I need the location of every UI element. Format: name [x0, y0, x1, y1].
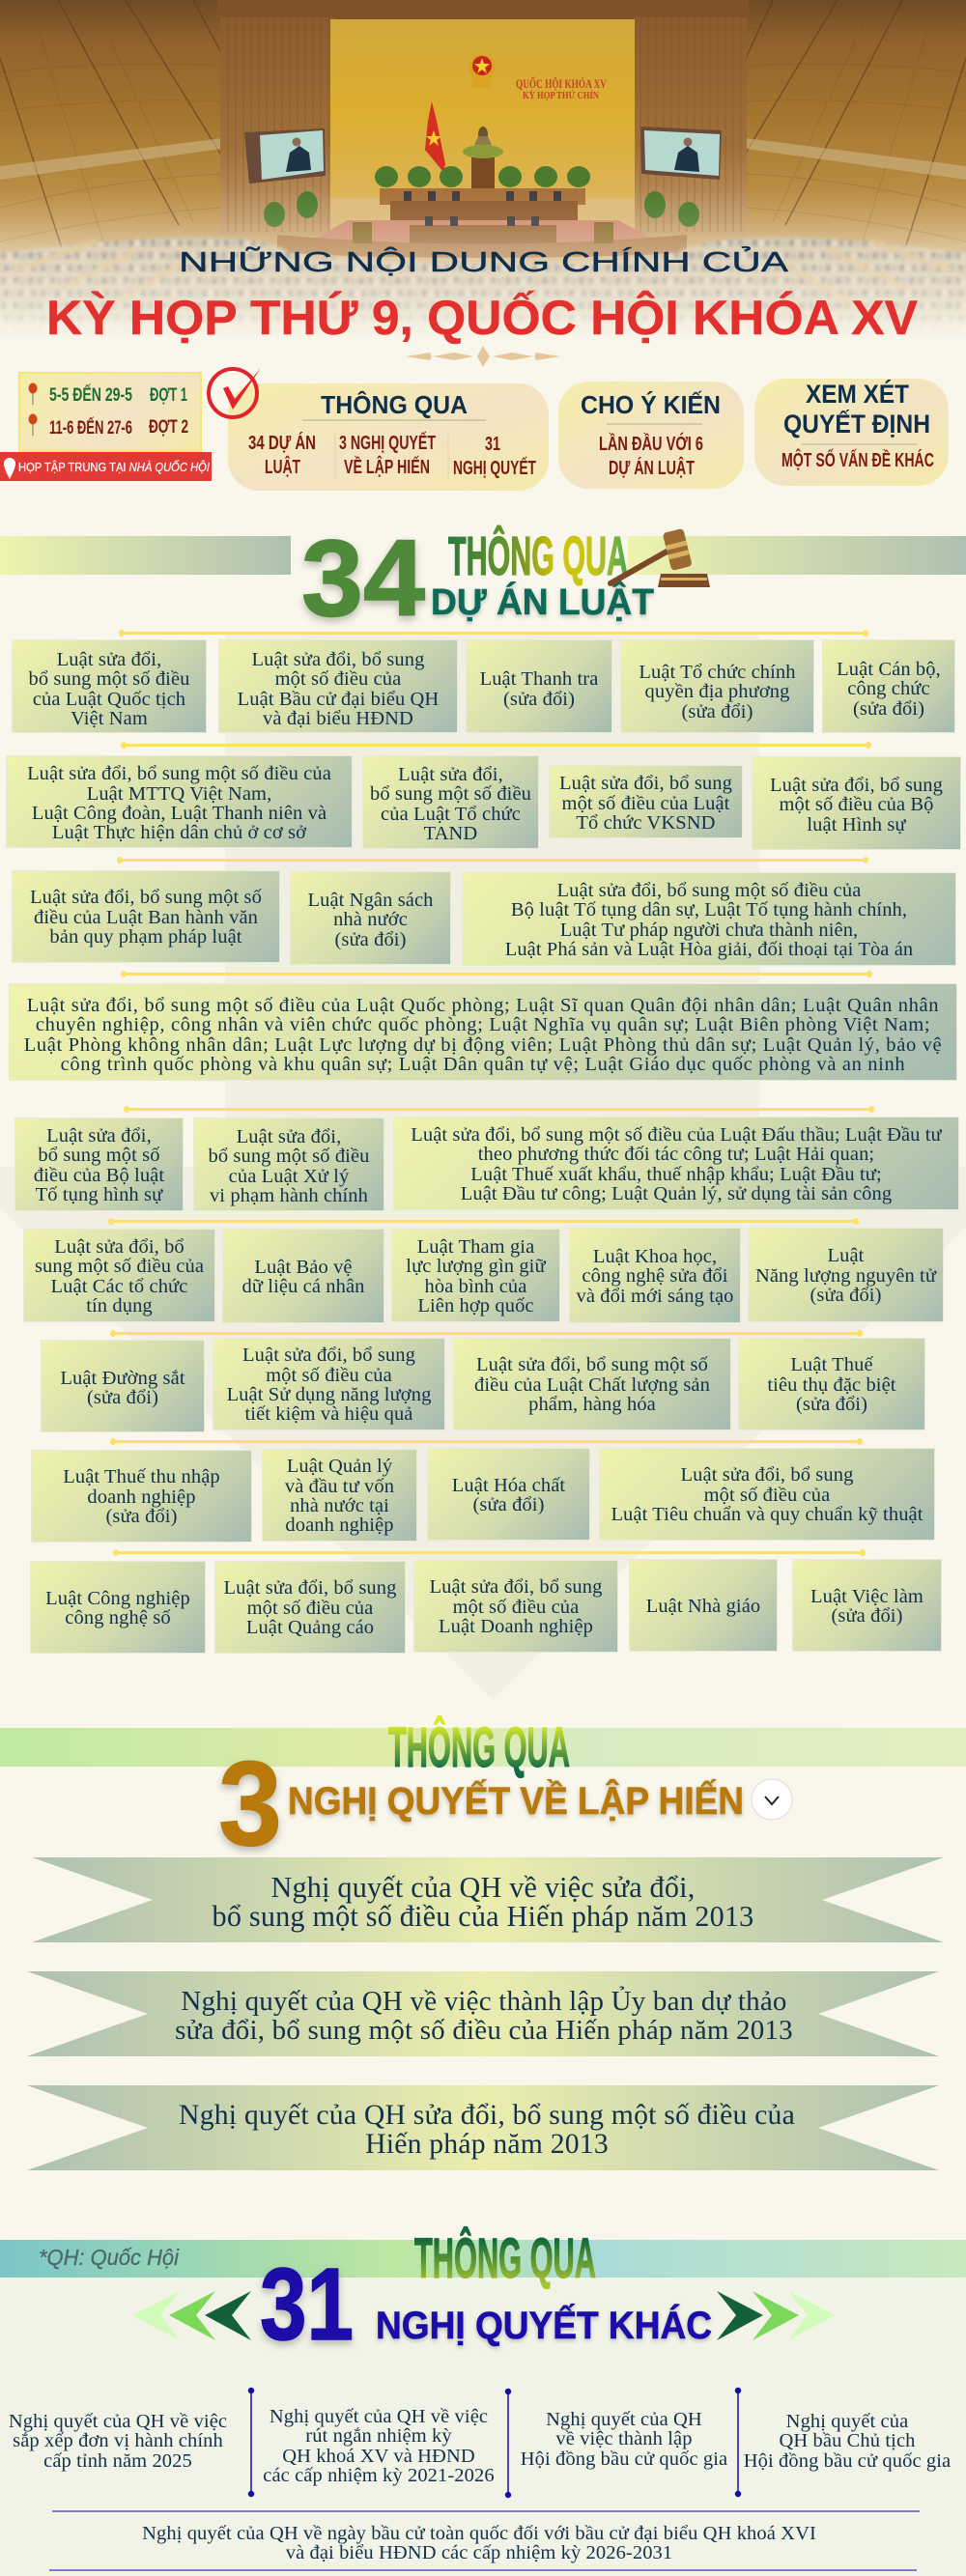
law box: Đường sắt: Luật Đường sắt [60, 1368, 185, 1389]
ribbon 1 text: Nghị quyết của QH về việc sửa đổi, [271, 1871, 695, 1904]
law box: Thanh tra: Luật Thanh tra [480, 668, 598, 690]
law box: Cán bộ, công chức: (sửa đổi) [853, 698, 924, 720]
law box: Cán bộ, công chức [823, 640, 954, 732]
law box: chính quyền địa phương: Luật Tổ chức chính [639, 662, 796, 683]
panel: cho ý kiến [558, 382, 744, 489]
law box: Việc làm [793, 1560, 941, 1651]
phase 1: ĐỢT 1 [150, 385, 187, 406]
law box: Ngân sách nhà nước: Luật Ngân sách [307, 890, 434, 911]
law box: Xử lý vi phạm hành chính: bổ sung một số điều [208, 1146, 370, 1167]
law box: chính quyền địa phương [621, 640, 813, 732]
law box: quản lý vốn nhà nước: nhà nước tại [290, 1495, 389, 1516]
law box: Tổ chức VKSND: một số điều của Luật [562, 793, 729, 814]
law box: Quảng cáo: Luật Quảng cáo [246, 1617, 374, 1638]
law box: Doanh nghiệp: một số điều của [453, 1597, 579, 1618]
law box: năng lượng nguyên tử: Luật [828, 1245, 864, 1266]
law box: Tố tụng: Bộ luật Tố tụng dân sự, Luật Tố tụng hành chính, [511, 899, 907, 920]
ribbon 3 text: Hiến pháp năm 2013 [365, 2129, 609, 2160]
law box: Ngân sách nhà nước: nhà nước [333, 909, 408, 930]
law box: MTTQ: Luật Thực hiện dân chủ ở cơ sở [52, 822, 306, 843]
law box: Tổ chức TAND: TAND [424, 823, 477, 844]
resolution column 4 [744, 2411, 951, 2472]
law box: Ban hành văn bản: điều của Luật Ban hành văn [34, 907, 258, 928]
law box: Việc làm: (sửa đổi) [831, 1605, 903, 1627]
wall caption [516, 76, 607, 101]
law box: Tố tụng: Luật Phá sản và Luật Hòa giải, đối thoại tại Tòa án [505, 939, 913, 960]
date 2: 11-6 ĐẾN 27-6 [49, 417, 132, 439]
panel: thông qua: 3 NGHỊ QUYẾT [339, 432, 436, 454]
law box: Quảng cáo: Luật sửa đổi, bổ sung [224, 1577, 396, 1599]
law box: Ngân sách nhà nước [291, 872, 450, 964]
law box: gìn giữ hòa bình: lực lượng gìn giữ [406, 1256, 546, 1277]
law box: Đấu thầu: Luật Thuế xuất khẩu, thuế nhập khẩu; Luật Đầu tư; [470, 1163, 882, 1184]
law box: Bộ luật Hình sự [753, 757, 960, 849]
arrows right [717, 2291, 835, 2340]
podium tables [277, 188, 687, 258]
law box: Tố tụng hình sự: Tố tụng hình sự [36, 1184, 162, 1205]
law box: Bộ luật Hình sự: luật Hình sự [807, 814, 906, 835]
resolution column 2: QH khoá XV và HĐND [282, 2446, 475, 2467]
ribbon 2 text [175, 1986, 793, 2046]
panel: thông qua [228, 383, 549, 491]
law box: Đấu thầu: theo phương thức đối tác công tư; Luật Hải quan; [478, 1144, 874, 1165]
section heading: 34 dự án luật: DỰ ÁN LUẬT [431, 580, 654, 623]
law box: gìn giữ hòa bình [392, 1230, 559, 1321]
law box: Ngân sách nhà nước: (sửa đổi) [334, 929, 407, 950]
section heading: 3 nghị quyết về lập hiến: NGHỊ QUYẾT VỀ LẬP HIẾN [288, 1778, 744, 1823]
section heading: 31 nghị quyết khác: NGHỊ QUYẾT KHÁC [376, 2303, 712, 2347]
law box: Hóa chất [428, 1449, 589, 1540]
law box: Tổ chức TAND [363, 756, 538, 848]
law box: gìn giữ hòa bình: Luật Tham gia [417, 1236, 534, 1258]
law box: công nghiệp công nghệ số [31, 1562, 205, 1653]
law box: khoa học công nghệ [570, 1229, 740, 1322]
bust and pillar [463, 127, 503, 190]
law box: thuế thu nhập doanh nghiệp: (sửa đổi) [105, 1506, 178, 1527]
law box: khoa học công nghệ: Luật Khoa học, [593, 1246, 717, 1267]
ornament divider [406, 346, 560, 367]
law box: Đấu thầu: Luật Đầu tư công; Luật Quản lý, sử dụng tài sản công [461, 1183, 892, 1204]
resolution column 3: Nghị quyết của QH [546, 2409, 702, 2430]
resolution column 2: các cấp nhiệm kỳ 2021-2026 [263, 2465, 495, 2486]
law box: năng lượng tiết kiệm [213, 1339, 444, 1430]
final resolution text: và đại biểu HĐND các cấp nhiệm kỳ 2026-2031 [286, 2542, 672, 2563]
venue text: HỌP TẬP TRUNG TẠI NHÀ QUỐC HỘI [18, 460, 210, 474]
panel: xem xét quyết định [754, 379, 949, 486]
law box: Nhà giáo [630, 1560, 777, 1651]
law box: tiêu thụ đặc biệt: tiêu thụ đặc biệt [767, 1374, 896, 1396]
icon: pin 1 [29, 382, 37, 405]
section heading: 31 nghị quyết khác: THÔNG QUA [414, 2227, 596, 2290]
law box: Ban hành văn bản [13, 871, 279, 962]
law box: Tố tụng hình sự: điều của Bộ luật [34, 1165, 164, 1186]
section heading: 3 nghị quyết về lập hiến: THÔNG QUA [388, 1716, 570, 1779]
icon: red check mark [207, 367, 261, 419]
law box: quản lý vốn nhà nước: doanh nghiệp [285, 1514, 394, 1536]
ribbon 1 text: bổ sung một số điều của Hiến pháp năm 2013 [213, 1900, 753, 1933]
law box: Tổ chức VKSND: Luật sửa đổi, bổ sung [559, 773, 732, 794]
law box: Quốc tịch: của Luật Quốc tịch [33, 688, 185, 709]
right screen [640, 127, 722, 180]
law box: quốc phòng [10, 984, 956, 1080]
title line 2: KỲ HỌP THỨ 9, QUỐC HỘI KHÓA XV [46, 290, 919, 345]
law box: Cán bộ, công chức: Luật Cán bộ, [837, 659, 941, 680]
icon: chevron button [752, 1779, 792, 1820]
law box: Quốc tịch [13, 640, 206, 732]
law box: tổ chức tín dụng: Luật sửa đổi, bổ [54, 1236, 185, 1258]
law box: Ban hành văn bản: bản quy phạm pháp luật [49, 926, 242, 948]
law box: Thanh tra [467, 640, 611, 732]
panel: xem xét quyết định: QUYẾT ĐỊNH [783, 409, 930, 439]
resolution column 1: Nghị quyết của QH về việc [9, 2411, 227, 2432]
law box: Tố tụng hình sự: Luật sửa đổi, [46, 1125, 152, 1146]
law box: Đấu thầu [394, 1118, 958, 1209]
resolution column 2 [263, 2406, 495, 2486]
law box: Bầu cử: và đại biểu HĐND [263, 708, 413, 729]
law box: công nghiệp công nghệ số: Luật Công nghiệp [45, 1588, 190, 1609]
phase 2: ĐỢT 2 [149, 417, 188, 438]
law box: dữ liệu cá nhân: dữ liệu cá nhân [242, 1276, 365, 1297]
delegates seating [0, 238, 966, 338]
resolution column 3 [521, 2409, 727, 2470]
law box: Tố tụng [463, 873, 955, 965]
law box: Quốc tịch: Việt Nam [71, 708, 148, 729]
panel: session dates [18, 372, 202, 452]
law box: Xử lý vi phạm hành chính: Luật sửa đổi, [237, 1126, 341, 1147]
section heading: 34 dự án luật: 34 [301, 518, 425, 638]
law box: quốc phòng: công trình quốc phòng và khu quân sự; Luật Dân quân tự vệ; Luật Giáo dục quốc phòng và an ninh [61, 1054, 905, 1075]
emblem [469, 54, 496, 88]
law box: Bộ luật Hình sự: Luật sửa đổi, bổ sung [770, 775, 943, 796]
ribbon 2 text: sửa đổi, bổ sung một số điều của Hiến pháp năm 2013 [175, 2015, 793, 2046]
ribbon 3 text: Nghị quyết của QH sửa đổi, bổ sung một số điều của [179, 2100, 795, 2131]
law box: khoa học công nghệ: và đổi mới sáng tạo [576, 1286, 734, 1307]
section heading: 31 nghị quyết khác: *QH: Quốc Hội [39, 2245, 180, 2270]
ribbon 2 text: Nghị quyết của QH về việc thành lập Ủy ban dự thảo [181, 1986, 787, 2017]
resolution column 2: Nghị quyết của QH về việc [270, 2406, 488, 2427]
law box: chất lượng sản phẩm [454, 1339, 730, 1430]
resolution column 4: QH bầu Chủ tịch [779, 2430, 915, 2451]
law box: Đấu thầu: Luật sửa đổi, bổ sung một số điều của Luật Đấu thầu; Luật Đầu tư [411, 1124, 942, 1146]
law box: chính quyền địa phương: quyền địa phương [645, 681, 789, 702]
law box: Doanh nghiệp [414, 1561, 617, 1652]
law box: Quốc tịch: bổ sung một số điều [28, 668, 190, 690]
law box: Đường sắt [42, 1341, 204, 1431]
law box: quốc phòng: Luật sửa đổi, bổ sung một số điều của Luật Quốc phòng; Luật Sĩ quan Quân đội nhân dân; Luật Quân nhân [27, 995, 939, 1016]
ribbon 3 text [179, 2100, 795, 2160]
law box: Bầu cử [219, 640, 457, 732]
potted plants [264, 166, 699, 227]
law box: Quảng cáo: một số điều của [247, 1598, 373, 1619]
resolution column 2: rút ngắn nhiệm kỳ [305, 2425, 452, 2447]
panel: cho ý kiến: CHO Ý KIẾN [581, 390, 721, 419]
law box: MTTQ: Luật Công đoàn, Luật Thanh niên và [32, 803, 327, 824]
law box: Xử lý vi phạm hành chính: của Luật Xử lý [229, 1165, 349, 1186]
law box: quốc phòng: Luật Phòng không nhân dân; Luật Lực lượng dự bị động viên; Luật Phòng thủ dân sự; Luật Quản lý, bảo vệ [24, 1033, 942, 1055]
icon: pin 2 [29, 413, 37, 436]
law box: Cán bộ, công chức: công chức [847, 678, 930, 699]
panel: cho ý kiến: LẦN ĐẦU VỚI 6 [599, 432, 703, 455]
law box: Đường sắt: (sửa đổi) [87, 1387, 158, 1408]
law box: Tổ chức TAND: của Luật Tổ chức [381, 804, 521, 825]
law box: chất lượng sản phẩm: điều của Luật Chất lượng sản [474, 1374, 710, 1396]
panel: cho ý kiến: DỰ ÁN LUẬT [609, 456, 695, 479]
resolution column 1: sắp xếp đơn vị hành chính [13, 2430, 223, 2451]
law box: Việc làm: Luật Việc làm [810, 1586, 923, 1607]
panel: thông qua: VỀ LẬP HIẾN [344, 455, 430, 478]
law box: tổ chức tín dụng: tín dụng [86, 1295, 153, 1316]
law box: gìn giữ hòa bình: Liên hợp quốc [417, 1295, 534, 1316]
resolution column 1 [9, 2411, 227, 2472]
section heading: 31 nghị quyết khác: 31 [260, 2248, 354, 2362]
resolution column 1: cấp tỉnh năm 2025 [43, 2450, 192, 2472]
left screen [244, 128, 326, 184]
title line 1: NHỮNG NỘI DUNG CHÍNH CỦA [179, 245, 789, 278]
banner: venue [0, 452, 212, 481]
icon: location [4, 458, 15, 479]
law box: năng lượng tiết kiệm: một số điều của [266, 1365, 392, 1386]
law box: Xử lý vi phạm hành chính [194, 1118, 384, 1210]
law box: tổ chức tín dụng [24, 1230, 214, 1321]
section heading: 34 dự án luật [0, 518, 966, 638]
law box: Xử lý vi phạm hành chính: vi phạm hành chính [210, 1185, 368, 1206]
rule below final resolution [49, 2569, 917, 2571]
law box: quản lý vốn nhà nước: và đầu tư vốn [285, 1476, 394, 1497]
law box: Nhà giáo: Luật Nhà giáo [646, 1596, 760, 1617]
law box: Tố tụng: Luật Tư pháp người chưa thành niên, [560, 920, 858, 941]
law box: Tố tụng hình sự [15, 1118, 183, 1210]
ribbon 1 [32, 1857, 944, 1942]
law box: Hóa chất: Luật Hóa chất [452, 1475, 565, 1496]
law box: thuế thu nhập doanh nghiệp: Luật Thuế thu nhập [63, 1466, 220, 1487]
law box: Tổ chức TAND: Luật sửa đổi, [398, 764, 503, 785]
law box: chính quyền địa phương: (sửa đổi) [681, 701, 753, 722]
law box: năng lượng tiết kiệm: tiết kiệm và hiệu quả [244, 1403, 413, 1425]
section heading: 34 dự án luật: THÔNG QUA [448, 524, 628, 587]
resolution column 3: về việc thành lập [555, 2428, 693, 2449]
section heading: 3 nghị quyết về lập hiến: 3 [218, 1738, 282, 1871]
panel: thông qua: THÔNG QUA [321, 390, 468, 419]
icon: gavel [611, 528, 710, 587]
law box: tổ chức tín dụng: sung một số điều của [35, 1256, 204, 1277]
date 1: 5-5 ĐẾN 29-5 [49, 384, 132, 406]
law box: chất lượng sản phẩm: Luật sửa đổi, bổ sung một số [476, 1354, 708, 1375]
law box: quốc phòng: chuyên nghiệp, công nhân và viên chức quốc phòng; Luật Nghĩa vụ quân sự; Luật Biên phòng Việt Nam; [36, 1014, 930, 1035]
final resolution text [142, 2523, 816, 2563]
law box: khoa học công nghệ: công nghệ sửa đổi [582, 1265, 728, 1287]
law box: Thanh tra: (sửa đổi) [503, 688, 575, 709]
panel: thông qua: 31 [485, 434, 500, 455]
section heading: 3 nghị quyết về lập hiến [0, 1715, 966, 1871]
panel: thông qua: 34 DỰ ÁN [248, 432, 316, 454]
law box: tiêu thụ đặc biệt: (sửa đổi) [796, 1394, 867, 1415]
law box: gìn giữ hòa bình: hòa bình của [425, 1275, 526, 1296]
law box: Tổ chức VKSND: Tổ chức VKSND [576, 812, 716, 834]
law box: tiêu chuẩn kỹ thuật [600, 1449, 934, 1540]
law box: Hóa chất: (sửa đổi) [472, 1494, 545, 1515]
law box: tiêu chuẩn kỹ thuật: một số điều của [704, 1485, 830, 1506]
panel: thông qua: NGHỊ QUYẾT [453, 457, 536, 479]
resolution column 4: Nghị quyết của [786, 2411, 908, 2432]
law box: Tổ chức VKSND [550, 766, 742, 837]
ribbon 1 text [213, 1871, 753, 1933]
law box: năng lượng nguyên tử: Năng lượng nguyên tử [755, 1265, 936, 1287]
law list: 34 bills [6, 630, 961, 1654]
law box: MTTQ [7, 756, 352, 847]
law box: năng lượng tiết kiệm: Luật Sử dụng năng lượng [227, 1384, 431, 1405]
law box: thuế thu nhập doanh nghiệp: doanh nghiệp [87, 1486, 196, 1508]
final resolution text: Nghị quyết của QH về ngày bầu cử toàn quốc đối với bầu cử đại biểu QH khoá XVI [142, 2523, 816, 2544]
wall caption: QUỐC HỘI KHÓA XV [516, 76, 607, 91]
law box: tiêu chuẩn kỹ thuật: Luật sửa đổi, bổ sung [681, 1464, 853, 1486]
law box: Tổ chức TAND: bổ sung một số điều [370, 783, 531, 805]
law box: Tố tụng: Luật sửa đổi, bổ sung một số điều của [557, 880, 861, 901]
law box: quản lý vốn nhà nước: Luật Quản lý [287, 1456, 392, 1477]
header photo: National Assembly hall [0, 0, 966, 329]
law box: Doanh nghiệp: Luật Doanh nghiệp [439, 1616, 593, 1637]
resolution column 3: Hội đồng bầu cử quốc gia [521, 2449, 727, 2470]
law box: MTTQ: Luật MTTQ Việt Nam, [87, 783, 271, 805]
law box: năng lượng nguyên tử: (sửa đổi) [810, 1285, 882, 1306]
law box: Bộ luật Hình sự: một số điều của Bộ [779, 794, 934, 815]
arrows left [132, 2291, 251, 2340]
flag [425, 101, 445, 172]
panel: thông qua: LUẬT [265, 455, 300, 478]
law box: quản lý vốn nhà nước [263, 1450, 416, 1541]
law box: Tố tụng hình sự: bổ sung một số [38, 1145, 160, 1166]
law box: Doanh nghiệp: Luật sửa đổi, bổ sung [430, 1576, 602, 1598]
law box: năng lượng nguyên tử [749, 1229, 943, 1321]
law box: MTTQ: Luật sửa đổi, bổ sung một số điều của [27, 763, 331, 784]
panel: xem xét quyết định: XEM XÉT [806, 379, 909, 409]
law box: tiêu thụ đặc biệt: Luật Thuế [790, 1354, 873, 1375]
law box: Ban hành văn bản: Luật sửa đổi, bổ sung một số [30, 887, 262, 908]
law box: tiêu chuẩn kỹ thuật: Luật Tiêu chuẩn và quy chuẩn kỹ thuật [611, 1504, 923, 1525]
resolution column 4: Hội đồng bầu cử quốc gia [744, 2450, 951, 2472]
law box: Bầu cử: Luật Bầu cử đại biểu QH [238, 688, 439, 709]
law box: Quảng cáo [215, 1562, 405, 1653]
law box: thuế thu nhập doanh nghiệp [32, 1451, 251, 1542]
law box: Quốc tịch: Luật sửa đổi, [57, 649, 161, 670]
law box: tiêu thụ đặc biệt [739, 1339, 924, 1430]
law box: Bầu cử: Luật sửa đổi, bổ sung [252, 649, 424, 670]
law box: tổ chức tín dụng: Luật Các tổ chức [51, 1275, 187, 1296]
rule above final resolution [52, 2510, 920, 2512]
law box: dữ liệu cá nhân [223, 1230, 384, 1322]
law box: năng lượng tiết kiệm: Luật sửa đổi, bổ sung [242, 1345, 415, 1366]
law box: dữ liệu cá nhân: Luật Bảo vệ [254, 1257, 353, 1278]
law box: Bầu cử: một số điều của [275, 668, 401, 690]
law box: chất lượng sản phẩm: phẩm, hàng hóa [528, 1394, 656, 1415]
wall caption: KỲ HỌP THỨ CHÍN [523, 90, 599, 101]
law box: công nghiệp công nghệ số: công nghệ số [65, 1607, 171, 1628]
